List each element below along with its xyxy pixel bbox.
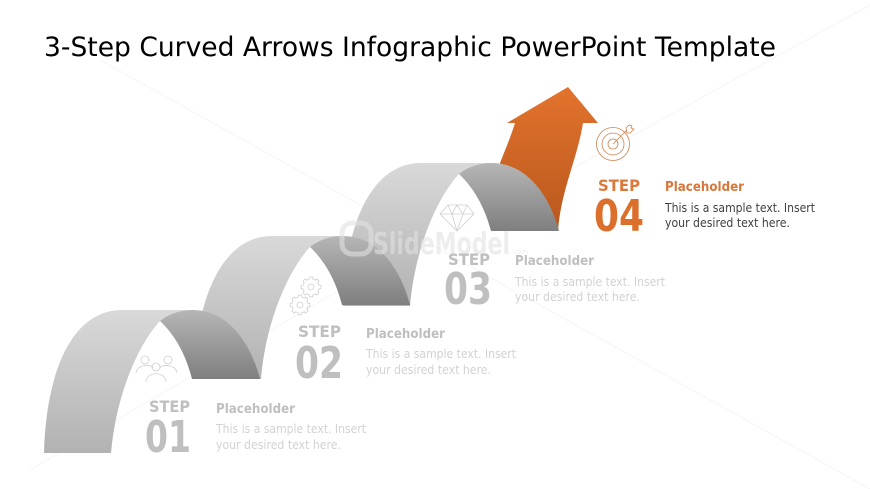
icon: target	[596, 125, 634, 160]
step 01 text block: STEP	[149, 397, 190, 416]
arch: step 2	[194, 236, 410, 379]
step 04 text block: Placeholder	[665, 180, 745, 195]
watermark: .com	[511, 248, 528, 256]
icon: gears	[290, 277, 321, 315]
step 01 text block: your desired text here.	[216, 438, 341, 452]
watermark: SlideModel	[373, 227, 510, 262]
step 03 text block	[444, 250, 665, 315]
step 03 text block: 03	[444, 264, 492, 315]
step 01 text block: This is a sample text. Insert	[215, 422, 366, 436]
step 02 text block: This is a sample text. Insert	[365, 347, 516, 361]
step 02 text block: 02	[295, 338, 343, 389]
step 03 text block: Placeholder	[515, 254, 595, 269]
title: 3-Step Curved Arrows Infographic PowerPoint Template	[44, 32, 776, 63]
step 04 text block	[594, 176, 815, 242]
step 03 text block: STEP	[448, 250, 490, 269]
watermark	[342, 223, 528, 262]
arch: step 3	[343, 163, 559, 306]
arch: step 1	[44, 310, 260, 453]
step 03 text block: your desired text here.	[515, 290, 640, 304]
step 03 text block: This is a sample text. Insert	[514, 275, 665, 289]
step 04 text block: 04	[594, 191, 644, 242]
step 04 text block: STEP	[598, 176, 640, 195]
orange arrow	[500, 87, 598, 231]
step 01 text block: 01	[145, 412, 191, 463]
step 04 text block: This is a sample text. Insert	[664, 201, 815, 215]
icon: diamond	[440, 205, 474, 231]
icon: people	[136, 356, 177, 382]
step 01 text block: Placeholder	[216, 402, 296, 417]
step 02 text block: STEP	[298, 322, 341, 341]
step 01 text block	[145, 397, 366, 463]
step 02 text block: Placeholder	[366, 327, 446, 342]
step 04 text block: your desired text here.	[665, 216, 790, 230]
step 02 text block	[295, 322, 516, 389]
step 02 text block: your desired text here.	[366, 363, 491, 377]
